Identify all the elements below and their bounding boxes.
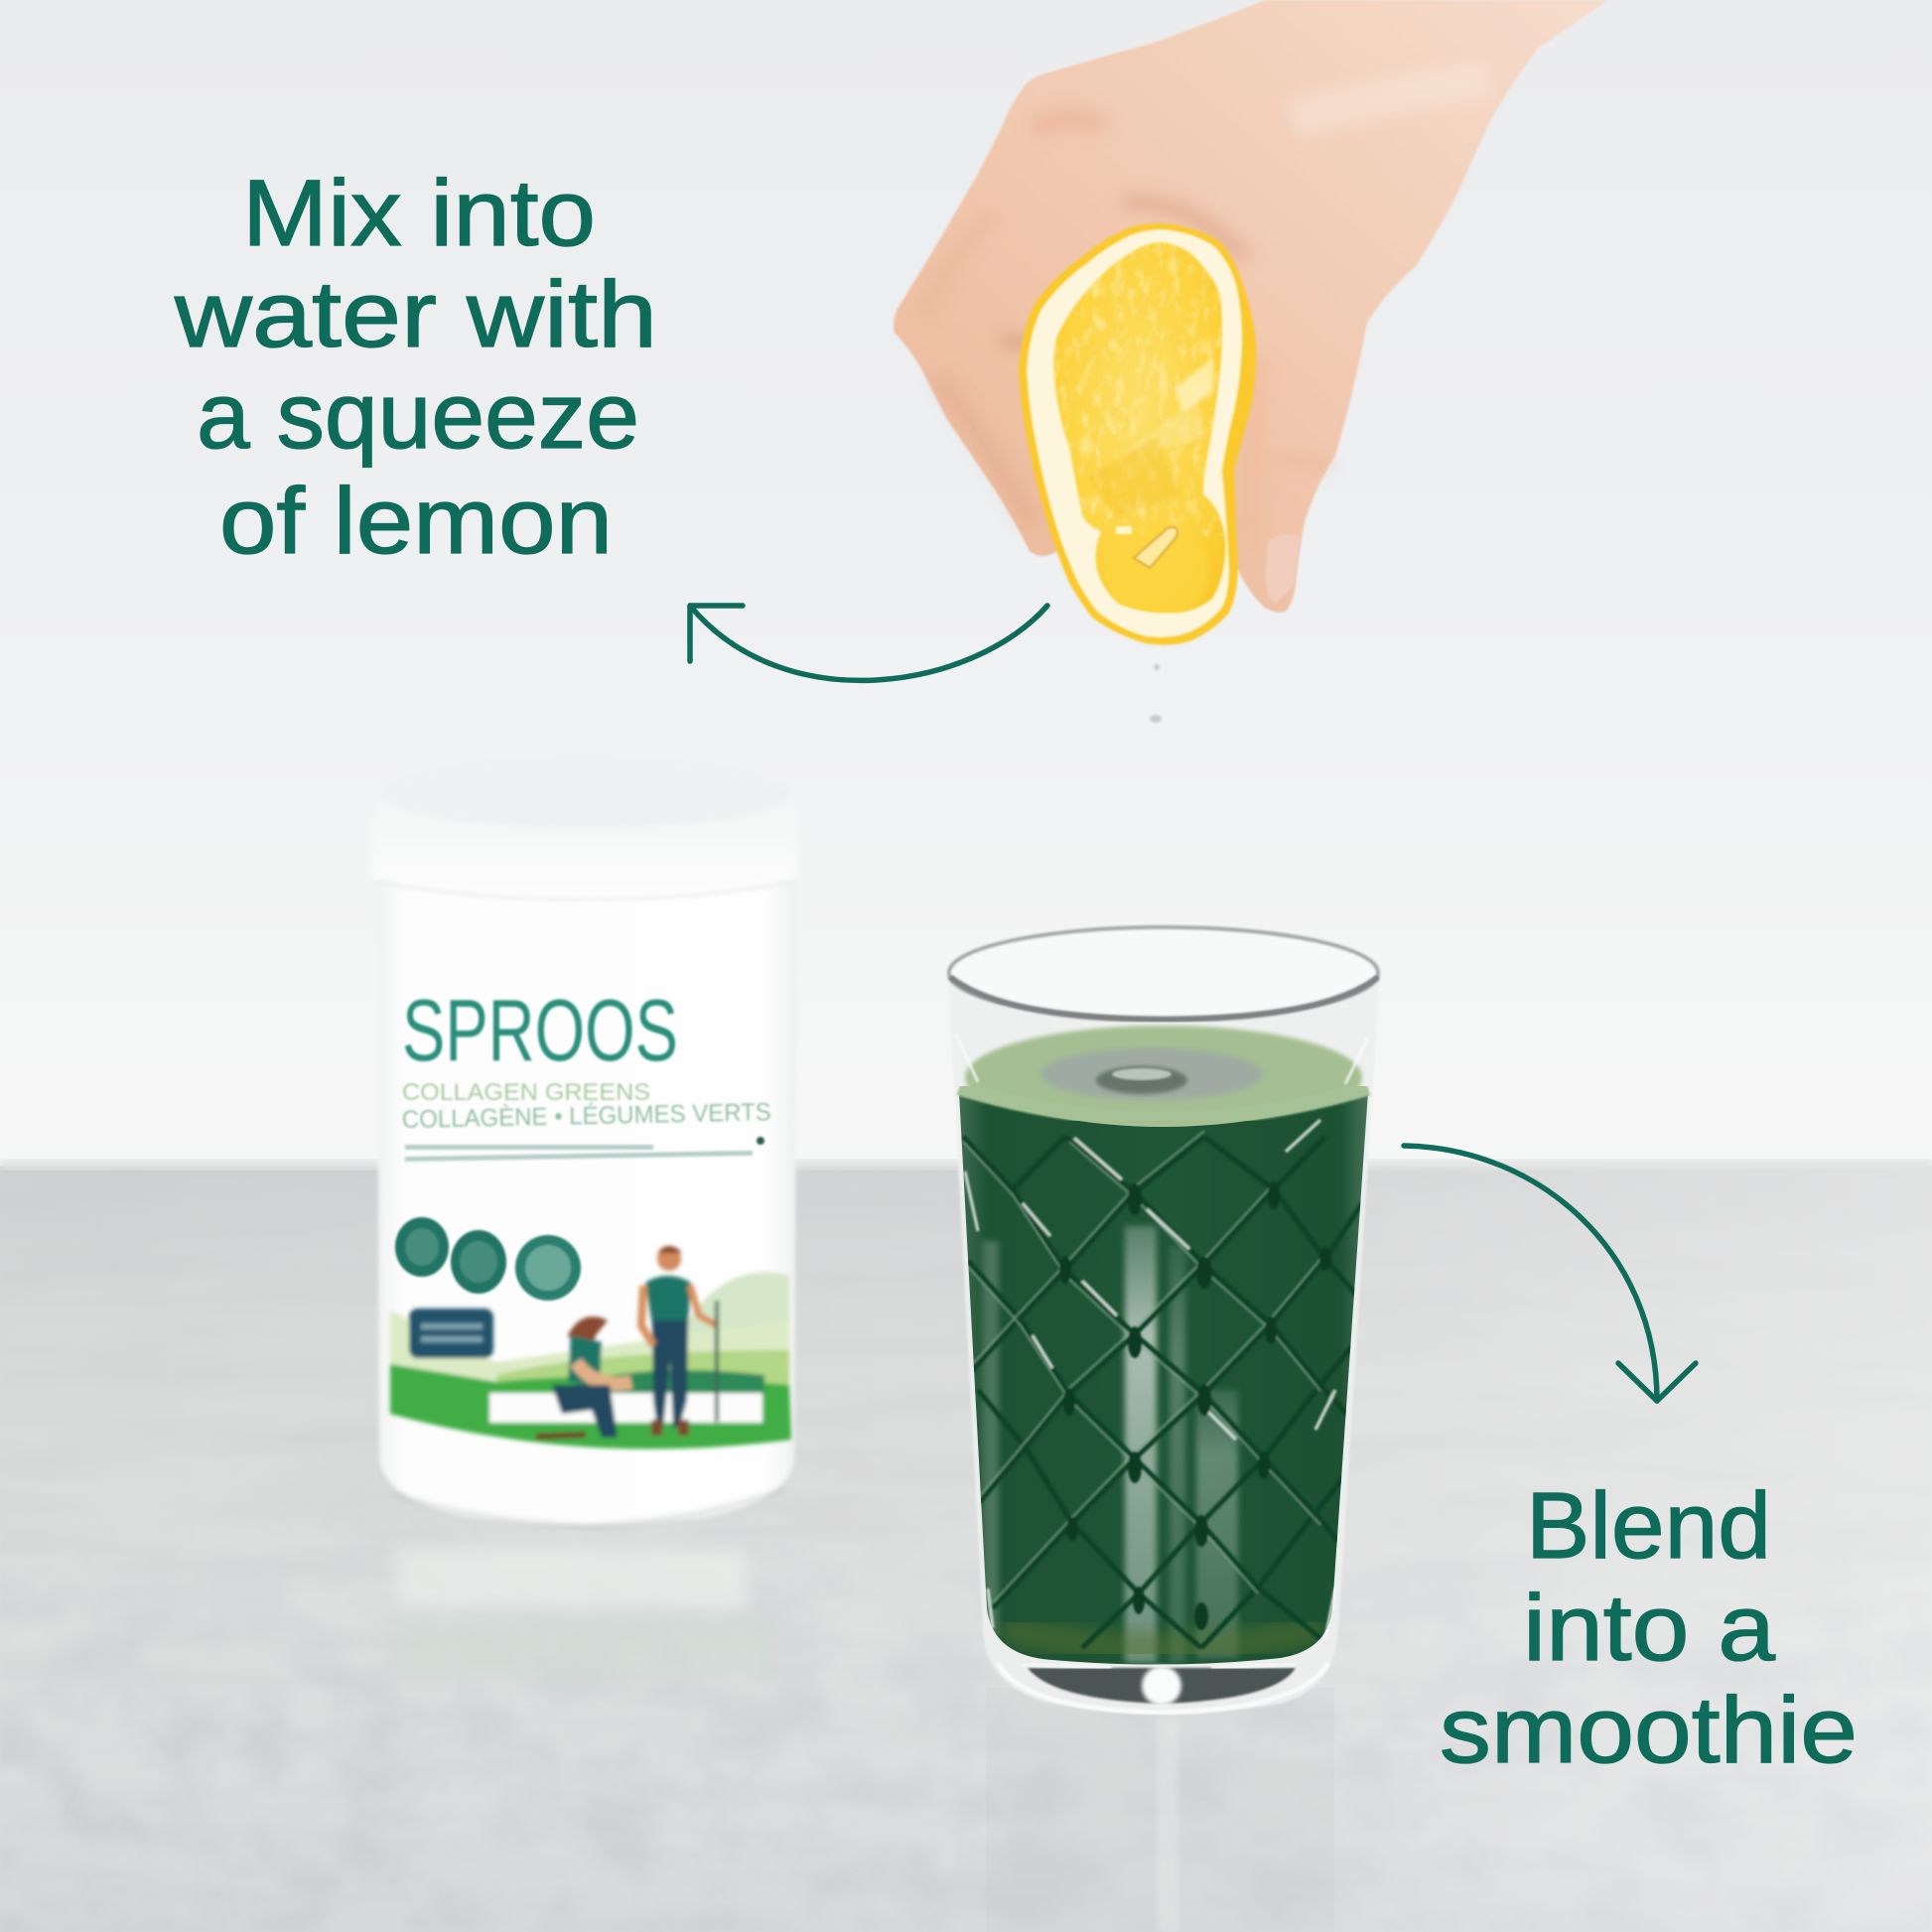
rim front edge (950, 977, 1378, 1020)
cut-glass diamond lattice (963, 1120, 1370, 1648)
product jar (372, 759, 797, 1527)
man figure (657, 1247, 681, 1271)
glass body (948, 975, 1380, 1714)
jar reflection on table (397, 1549, 745, 1608)
brand label text (402, 981, 771, 1162)
drinking glass with green smoothie (948, 927, 1380, 1714)
caption: mix into water: water with (174, 262, 657, 367)
background: marble table (0, 1160, 1932, 1932)
caption: blend into smoothie: smoothie (1440, 1678, 1858, 1783)
arrow: glass to caption (1404, 1146, 1696, 1401)
hand squeezing lemon (894, 0, 1608, 723)
rim opening (949, 927, 1378, 1019)
lid top disc (382, 760, 789, 828)
brand label text: SPROOS (402, 981, 678, 1079)
glass reflection on table (986, 1688, 1334, 1932)
vertical reflections (983, 1226, 1238, 1663)
lemon flesh (1053, 242, 1225, 613)
caption: mix into water (174, 161, 657, 574)
jar lid (372, 759, 797, 898)
glass base (1028, 1668, 1296, 1704)
lemon rind (1019, 223, 1256, 645)
juice drops (1150, 664, 1162, 723)
liquid surface (965, 1026, 1362, 1129)
glass side sparkles (955, 1033, 1368, 1638)
caption: blend into smoothie: into a (1523, 1576, 1775, 1681)
woman figure (568, 1316, 608, 1360)
caption: blend into smoothie (1440, 1473, 1858, 1783)
liquid body (959, 1092, 1368, 1665)
lid lower edge (375, 882, 796, 899)
jar body (377, 874, 797, 1525)
label illustration (390, 1246, 791, 1449)
lemon pulp texture (1054, 242, 1223, 614)
thumbnail (1265, 534, 1301, 604)
arrow: lemon to caption (690, 606, 1047, 680)
brand label text: COLLAGEN GREENS (402, 1079, 650, 1106)
knuckle and finger shading (923, 79, 1489, 556)
hand (894, 0, 1608, 613)
brand label text: COLLAGÈNE • LÉGUMES VERTS (402, 1097, 771, 1134)
caption: mix into water: of lemon (219, 469, 613, 574)
caption: blend into smoothie: Blend (1526, 1473, 1771, 1579)
lemon pith (1027, 229, 1242, 637)
olive tint at liquid bottom (1003, 1628, 1320, 1648)
caption: mix into water: Mix into (242, 161, 596, 266)
badges (395, 1217, 581, 1301)
foam line (959, 1088, 1368, 1119)
caption: mix into water: a squeeze (197, 363, 639, 469)
background: wall (0, 0, 1932, 1191)
